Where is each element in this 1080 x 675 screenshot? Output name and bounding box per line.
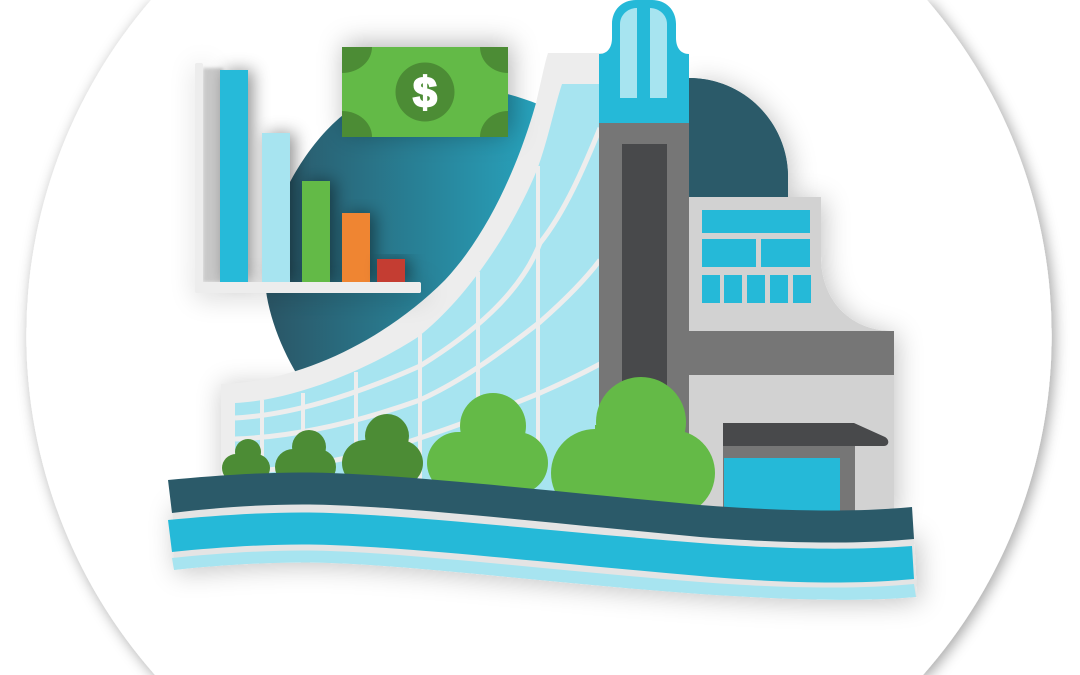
teal dome behind tower [689, 78, 788, 197]
bar chart [195, 63, 421, 293]
door frame [723, 446, 855, 516]
facade frame [221, 53, 602, 500]
light water band [172, 550, 916, 600]
dome shadow [689, 78, 788, 197]
axis bar redraw [195, 63, 421, 293]
tower body [599, 123, 689, 513]
bill medallion [396, 62, 454, 122]
tower cap [599, 0, 689, 123]
dark grey band [689, 331, 894, 375]
garage door and awning [723, 423, 888, 516]
facade curved grid lines [235, 128, 600, 472]
bar green [302, 181, 330, 282]
facade glass [235, 84, 602, 500]
upper block with flared side [689, 197, 893, 375]
dark bush medium [275, 430, 336, 485]
right building [689, 197, 894, 515]
cap window right [650, 8, 667, 98]
bill body [342, 47, 508, 137]
awning [723, 423, 888, 446]
dark bush large [342, 414, 423, 486]
facade soft shadow [221, 384, 400, 500]
large light bush [551, 377, 715, 517]
grey backing strip [172, 498, 917, 600]
cyan water band [168, 512, 914, 582]
lower block [689, 375, 894, 515]
cap window left [620, 8, 637, 98]
cyan door [724, 458, 840, 516]
bar orange [342, 213, 370, 282]
bushes [222, 377, 715, 517]
building windows [702, 210, 811, 303]
road and water bands [168, 472, 917, 600]
tower dark inset [622, 144, 667, 513]
central tower [599, 0, 689, 513]
dollar sign: $ [413, 69, 437, 117]
dark road band [168, 472, 914, 543]
glass curved facade [221, 53, 602, 500]
shelf [195, 282, 421, 293]
bar red [377, 259, 405, 282]
dollar bill [342, 47, 508, 137]
axis inner shade [203, 68, 223, 282]
chart axes [195, 63, 421, 293]
bill corners [342, 47, 508, 137]
bar light blue [262, 133, 290, 282]
dark bush small [222, 439, 270, 482]
teal circle backdrop [265, 86, 540, 376]
medium light bush [427, 393, 548, 494]
facade vertical grid lines [262, 166, 538, 480]
bar cyan [220, 70, 248, 282]
